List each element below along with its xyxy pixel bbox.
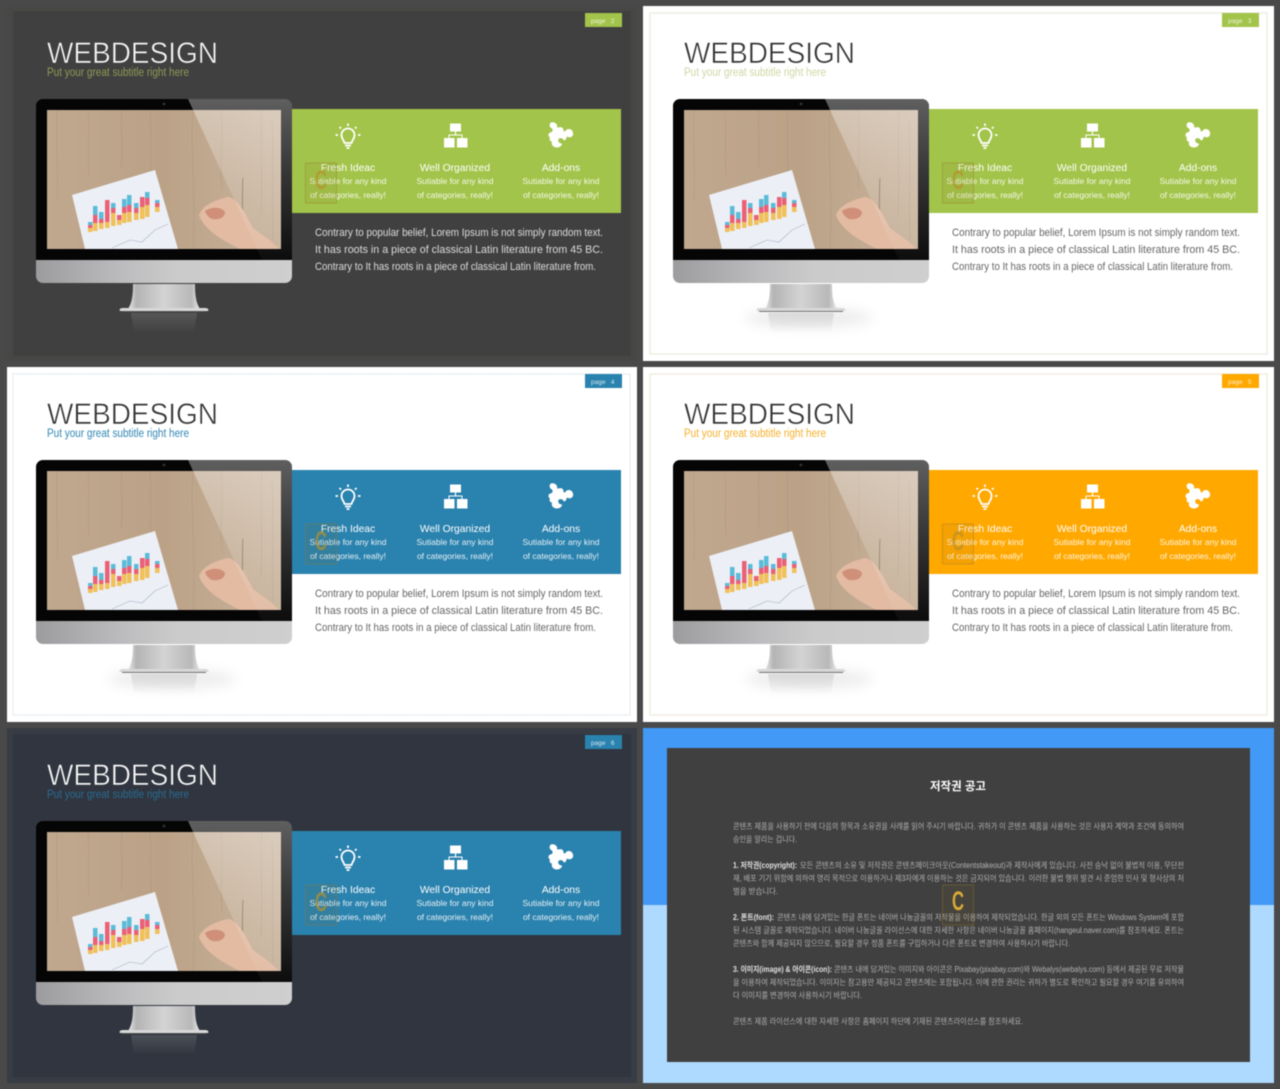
feature: add-ons: Sutiable for any kind (522, 176, 600, 186)
feature: well organized: Sutiable for any kind (1053, 176, 1131, 186)
body text: It has roots in a piece of classical Latin literature from 45 BC. (952, 244, 1240, 256)
subtitle: Put your great subtitle right here (47, 67, 189, 79)
title: WEBDESIGN (684, 398, 855, 431)
section 1: copyright: 모든 콘텐츠의 소유 및 저작권은 콘텐츠메이크아웃(Contentstakeout)과 제작사에게 있습니다. 사전 승낙 없이 불법적 이용, 무단전 (800, 860, 1184, 870)
icon: light bulb (972, 484, 998, 509)
feature: fresh ideas (946, 524, 1024, 561)
feature: fresh ideas: Fresh Ideac (321, 885, 375, 896)
section 3: image and icon: 을 이용하여 제작되었습니다. 이미지는 참고용만 제공되고 콘텐츠에는 포함됩니다. 이에 관한 권리는 귀하가 별도로 확인하고 필요할 경우 여기를 유의하여 (733, 977, 1184, 987)
icon: organization chart (444, 846, 468, 870)
subtitle: Put your great subtitle right here (47, 789, 189, 801)
watermark: C (315, 887, 327, 917)
feature: add-ons: Add-ons (542, 524, 580, 535)
section 3: image and icon: 콘텐츠 내에 담겨있는 이미지와 아이콘은 Pixabay(pixabay.com)와 Webalys(webalys.com) 등에서 제공된 무료 저작물 (834, 964, 1184, 974)
slide 4: white orange (643, 367, 1274, 722)
body text (952, 588, 1240, 634)
body text: Contrary to It has roots in a piece of classical Latin literature from. (952, 622, 1233, 634)
feature: fresh ideas (946, 163, 1024, 200)
feature: well organized (416, 524, 494, 561)
feature: well organized: of categories, really! (417, 190, 493, 200)
watermark: C (315, 165, 327, 195)
feature: well organized: of categories, really! (1054, 190, 1130, 200)
icon: puzzle piece (1186, 483, 1210, 508)
monitor mockup (36, 460, 292, 694)
notice panel (667, 748, 1250, 1062)
feature: well organized: of categories, really! (1054, 551, 1130, 561)
feature: fresh ideas: Sutiable for any kind (946, 537, 1024, 547)
page tag: page 4 (591, 379, 615, 386)
body text: Contrary to popular belief, Lorem Ipsum is not simply random text. (315, 227, 603, 239)
feature band (292, 831, 621, 935)
watermark: C (315, 526, 327, 556)
body text: It has roots in a piece of classical Latin literature from 45 BC. (952, 605, 1240, 617)
section 1: copyright: 벌을 받습니다. (733, 886, 778, 896)
section 2: font: 2. 폰트(font): (733, 913, 774, 922)
feature band (292, 109, 621, 213)
section 2: font: 콘텐츠와 함께 제공되지 않으므로, 필요할 경우 정품 폰트를 구입하거나 다른 폰트로 변경하여 사용하시기 바랍니다. (733, 938, 1070, 948)
icon: organization chart (444, 484, 468, 508)
feature: add-ons: Add-ons (542, 885, 580, 896)
feature: add-ons: of categories, really! (523, 912, 599, 922)
slide 3: white blue (7, 367, 637, 722)
feature: well organized: Sutiable for any kind (416, 176, 494, 186)
section 3: image and icon (733, 964, 1184, 1000)
feature: fresh ideas (309, 524, 387, 561)
subtitle: Put your great subtitle right here (47, 428, 189, 440)
page tag (585, 735, 622, 749)
slide 5: dark navy (7, 728, 637, 1083)
icon: organization chart (444, 124, 468, 148)
feature: add-ons (522, 885, 600, 922)
feature: well organized: Well Organized (420, 524, 490, 535)
watermark (942, 885, 974, 925)
feature: well organized: of categories, really! (417, 912, 493, 922)
title: WEBDESIGN (47, 398, 218, 431)
icon: organization chart (1081, 484, 1104, 508)
feature: add-ons: Sutiable for any kind (522, 537, 600, 547)
page tag: page 5 (1228, 379, 1252, 386)
page tag (585, 374, 622, 388)
section 1: copyright (733, 860, 1184, 896)
feature: add-ons (522, 163, 600, 200)
notice intro: 콘텐츠 제품을 사용하기 전에 다음의 항목과 소유권을 사례를 읽어 주시기 바랍니다. 귀하가 이 콘텐츠 제품을 사용하는 것은 사용자 계약과 조건에 동의하여 (733, 821, 1184, 831)
feature: fresh ideas: Fresh Ideac (958, 163, 1012, 174)
page tag: page 6 (591, 740, 615, 747)
feature: add-ons: Add-ons (1179, 163, 1217, 174)
feature: fresh ideas (309, 885, 387, 922)
body text: It has roots in a piece of classical Latin literature from 45 BC. (315, 244, 603, 256)
section 3: image and icon: 3. 이미지(image) & 아이콘(icon): (733, 964, 832, 974)
subtitle: Put your great subtitle right here (684, 67, 826, 79)
body text: Contrary to It has roots in a piece of classical Latin literature from. (315, 622, 596, 634)
feature: fresh ideas: of categories, really! (310, 551, 386, 561)
icon: puzzle piece (548, 483, 573, 508)
feature: well organized: Sutiable for any kind (416, 898, 494, 908)
title: WEBDESIGN (684, 37, 855, 70)
icon: light bulb (336, 484, 360, 509)
subtitle: Put your great subtitle right here (684, 428, 826, 440)
icon: puzzle piece (1186, 122, 1210, 148)
monitor mockup (673, 99, 929, 333)
feature: fresh ideas: Fresh Ideac (958, 524, 1012, 535)
body text: Contrary to It has roots in a piece of classical Latin literature from. (315, 261, 596, 273)
watermark (942, 524, 974, 564)
icon: puzzle piece (548, 122, 573, 148)
feature: well organized: Sutiable for any kind (1053, 537, 1131, 547)
feature: well organized (416, 885, 494, 922)
feature: well organized: Well Organized (420, 885, 490, 896)
monitor mockup (36, 821, 292, 1055)
section 2: font: 콘텐츠 내에 담겨있는 한글 폰트는 네이버 나눔글꼴의 저작물을 이용하여 제작되었습니다. 한글 외의 모든 폰트는 Windows System에 포함 (777, 912, 1185, 922)
feature: fresh ideas: Fresh Ideac (321, 524, 375, 535)
feature: add-ons (522, 524, 600, 561)
icon: organization chart (1081, 124, 1104, 148)
slide 1: dark green (7, 6, 637, 361)
monitor mockup (36, 99, 292, 333)
watermark: C (952, 886, 964, 916)
feature band (292, 470, 621, 574)
feature: fresh ideas: of categories, really! (947, 190, 1023, 200)
section 1: copyright: 1. 저작권(copyright): (733, 860, 797, 870)
body text: It has roots in a piece of classical Latin literature from 45 BC. (315, 605, 603, 617)
page tag (1222, 13, 1259, 27)
feature: well organized (416, 163, 494, 200)
notice footer: 콘텐츠 제품 라이선스에 대한 자세한 사항은 홈페이지 하단에 기재된 콘텐츠라이선스를 참조하세요. (733, 1016, 1023, 1026)
title: WEBDESIGN (47, 37, 218, 70)
icon: light bulb (336, 846, 360, 870)
body text: Contrary to popular belief, Lorem Ipsum is not simply random text. (952, 588, 1240, 600)
feature: add-ons: Add-ons (1179, 524, 1217, 535)
feature band (929, 470, 1258, 574)
feature: fresh ideas: Sutiable for any kind (946, 176, 1024, 186)
feature: fresh ideas: Sutiable for any kind (309, 176, 387, 186)
feature: add-ons: Add-ons (542, 163, 580, 174)
feature: add-ons: of categories, really! (1160, 190, 1236, 200)
feature: add-ons (1159, 524, 1237, 561)
watermark (942, 163, 974, 203)
monitor shadow (745, 308, 873, 328)
feature: fresh ideas: of categories, really! (310, 190, 386, 200)
feature band (929, 109, 1258, 213)
feature: well organized: of categories, really! (417, 551, 493, 561)
section 2: font (733, 912, 1185, 948)
feature: fresh ideas (309, 163, 387, 200)
body text: Contrary to It has roots in a piece of classical Latin literature from. (952, 261, 1233, 273)
feature: add-ons: of categories, really! (1160, 551, 1236, 561)
feature: add-ons: Sutiable for any kind (1159, 176, 1237, 186)
watermark (306, 885, 336, 925)
feature: add-ons (1159, 163, 1237, 200)
page tag (585, 13, 622, 27)
feature: add-ons: of categories, really! (523, 551, 599, 561)
feature: add-ons: of categories, really! (523, 190, 599, 200)
notice intro (733, 821, 1184, 844)
icon: light bulb (336, 124, 360, 148)
notice intro: 승인을 알리는 겁니다. (733, 834, 797, 844)
feature: fresh ideas: Sutiable for any kind (309, 898, 387, 908)
feature: fresh ideas: Sutiable for any kind (309, 537, 387, 547)
body text: Contrary to popular belief, Lorem Ipsum is not simply random text. (952, 227, 1240, 239)
section 2: font: 된 시스템 글꼴로 제작되었습니다. 네이버 나눔글꼴 라이선스에 대한 자세한 사항은 네이버 나눔글꼴 홈페이지(hangeul.naver.com)를 참조하세요. 폰트는 (733, 925, 1184, 935)
watermark: C (952, 165, 964, 195)
feature: add-ons: Sutiable for any kind (522, 898, 600, 908)
title: WEBDESIGN (47, 759, 218, 792)
icon: light bulb (972, 124, 998, 148)
feature: well organized: Well Organized (1057, 163, 1127, 174)
monitor shadow (745, 669, 873, 689)
section 1: copyright: 재, 배포 기기 위함에 의하여 영리 목적으로 이용하거나 제3자에게 이용하는 것은 금지되어 있습니다. 이러한 불법 행위 발견 시 준엄한 민사 및 형사상의 처 (733, 873, 1184, 883)
page tag (1222, 374, 1259, 388)
monitor shadow (108, 669, 236, 689)
slide 2: white green (643, 6, 1274, 361)
section 3: image and icon: 다 이미지를 변경하여 사용하시기 바랍니다. (733, 990, 862, 1000)
watermark (306, 163, 336, 203)
body text (952, 227, 1240, 273)
feature: add-ons: Sutiable for any kind (1159, 537, 1237, 547)
body text (315, 227, 603, 273)
feature: fresh ideas: of categories, really! (947, 551, 1023, 561)
icon: puzzle piece (548, 844, 573, 870)
watermark (306, 524, 336, 564)
feature: well organized: Well Organized (1057, 524, 1127, 535)
feature: fresh ideas: of categories, really! (310, 912, 386, 922)
slide 6: copyright notice (643, 728, 1274, 1083)
feature: well organized: Sutiable for any kind (416, 537, 494, 547)
feature: fresh ideas: Fresh Ideac (321, 163, 375, 174)
page tag: page 2 (591, 18, 615, 25)
feature: well organized (1053, 524, 1131, 561)
feature: well organized (1053, 163, 1131, 200)
notice heading: 저작권 공고 (930, 779, 986, 793)
page tag: page 3 (1228, 18, 1252, 25)
watermark: C (952, 526, 964, 556)
monitor mockup (673, 460, 929, 694)
body text (315, 588, 603, 634)
body text: Contrary to popular belief, Lorem Ipsum is not simply random text. (315, 588, 603, 600)
feature: well organized: Well Organized (420, 163, 490, 174)
